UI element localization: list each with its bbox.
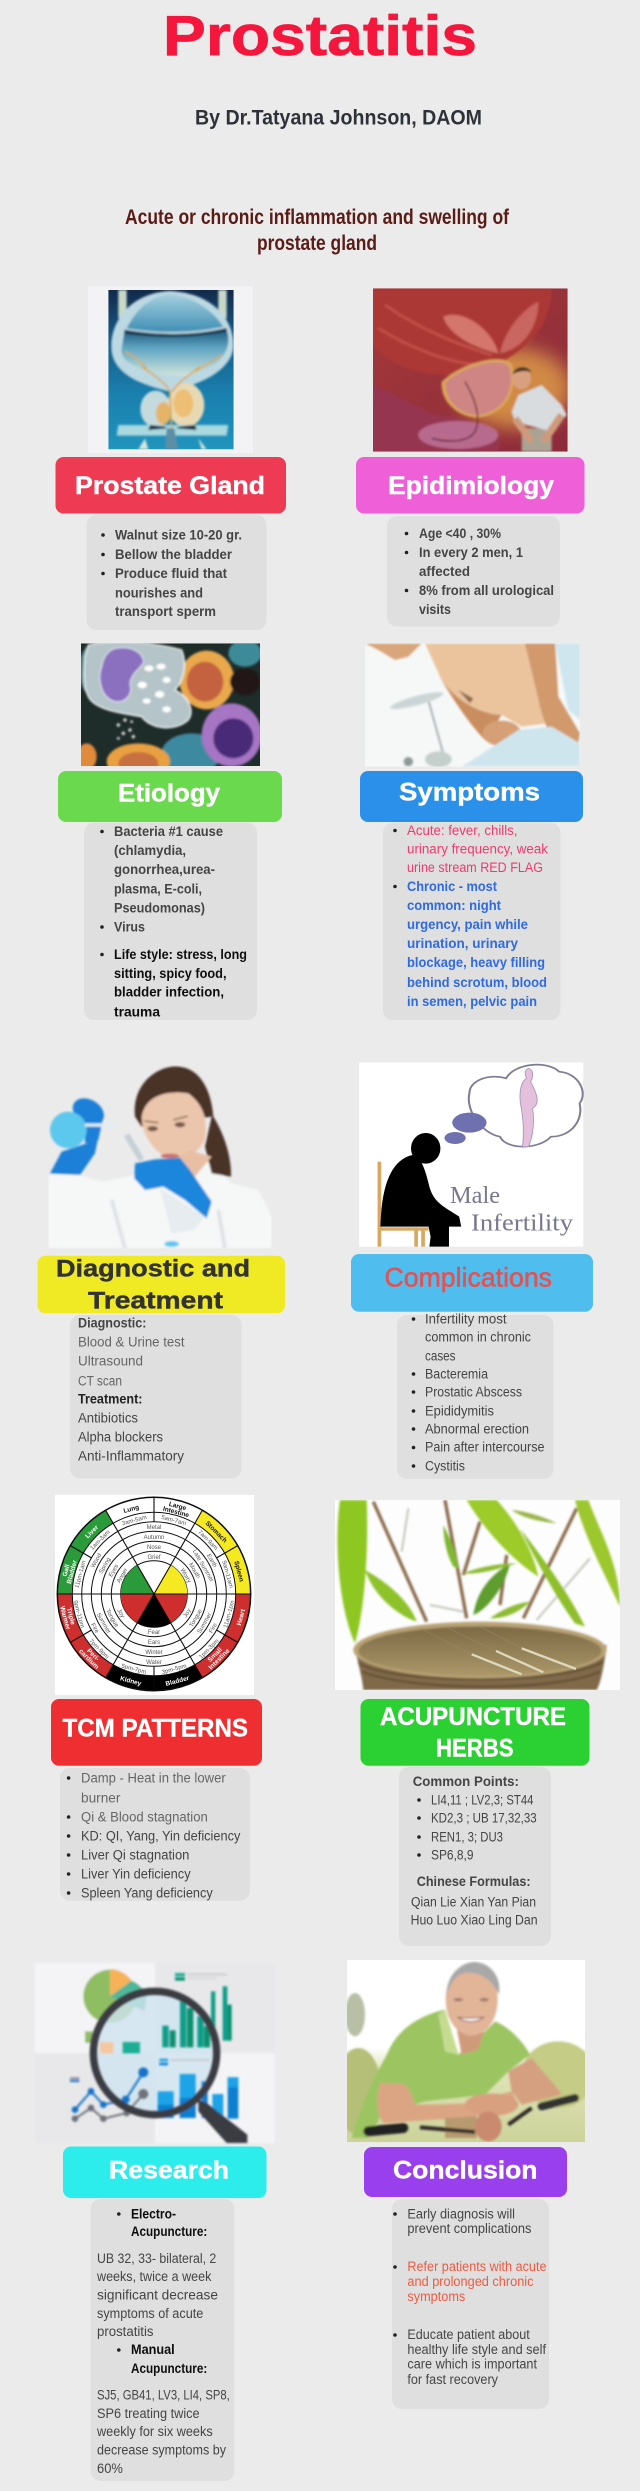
text box: epidemiology facts: Age <40 , 30% xyxy=(419,526,501,541)
text box: acute and chronic symptoms: blockage, heavy filling xyxy=(407,955,545,970)
text box: complications list xyxy=(397,1311,554,1479)
text box: etiology causes: Bacteria #1 cause xyxy=(114,824,223,839)
image: magnifying glass over charts xyxy=(35,1963,275,2143)
label: Etiology: Etiology xyxy=(118,780,220,808)
definition: prostate gland xyxy=(257,232,377,255)
text box: epidemiology facts: affected xyxy=(419,564,470,579)
text box: diagnostic and treatment list: Blood & Urine test xyxy=(78,1334,185,1349)
image: TCM organ clock wheel: Eyes xyxy=(108,1564,120,1578)
text box: conclusion points: prevent complications xyxy=(407,2221,532,2236)
image: TCM organ clock wheel: Lung xyxy=(123,1504,140,1515)
text box: TCM pattern list: Qi & Blood stagnation xyxy=(81,1809,208,1824)
text box: prostate gland facts: Walnut size 10-20 gr. xyxy=(115,528,242,543)
text box: acute and chronic symptoms: urgency, pain while xyxy=(407,917,528,932)
text box: research findings: decrease symptoms by xyxy=(97,2442,226,2458)
panel: conclusion xyxy=(335,1960,595,2409)
text box: acute and chronic symptoms: Acute: fever, chills, xyxy=(407,823,518,838)
image: TCM organ clock wheel: Kidney xyxy=(119,1675,142,1688)
text box: common points and formulas: Common Points: xyxy=(413,1774,519,1789)
text box: diagnostic and treatment list: Anti-Inflammatory xyxy=(78,1448,184,1463)
label: Research: Research xyxy=(109,2157,229,2185)
text box: diagnostic and treatment list: CT scan xyxy=(78,1373,122,1388)
image: TCM organ clock wheel: 9pm-11pm xyxy=(72,1600,85,1629)
text box: etiology causes: sitting, spicy food, xyxy=(114,966,226,981)
text box: complications list: Infertility most xyxy=(425,1311,507,1326)
panel: diagnostic and treatment xyxy=(38,1067,285,1478)
image: TCM organ clock wheel: 1pm-3pm xyxy=(198,1638,221,1661)
text box: conclusion points xyxy=(392,2199,549,2409)
image: TCM organ clock wheel: Liver xyxy=(84,1524,100,1540)
text box: TCM pattern list: KD: QI, Yang, Yin deficiency xyxy=(81,1828,241,1843)
image: TCM organ clock wheel: Bladder xyxy=(165,1675,190,1688)
image: TCM organ clock wheel: Stomach xyxy=(204,1520,228,1544)
text box: acute and chronic symptoms: in semen, pelvic pain xyxy=(407,994,537,1009)
image: TCM organ clock wheel: Mouth xyxy=(187,1562,201,1580)
image: TCM organ clock wheel: 5am-7am xyxy=(161,1515,187,1527)
text box: conclusion points: Educate patient about xyxy=(407,2327,530,2342)
text box: TCM pattern list: Liver Yin deficiency xyxy=(81,1866,191,1881)
text box: research findings: Acupuncture: xyxy=(131,2361,207,2376)
image: TCM organ clock wheel: Anger xyxy=(116,1568,129,1584)
image: TCM organ clock wheel: 11am-1pm xyxy=(223,1600,236,1629)
text box: research findings: significant decrease xyxy=(97,2287,218,2302)
text box: complications list: Abnormal erection xyxy=(425,1421,529,1436)
image: TCM organ clock wheel: Bladder xyxy=(66,1559,79,1585)
definition xyxy=(125,206,510,255)
text box: diagnostic and treatment list: Antibiotics xyxy=(78,1410,138,1425)
label: Diagnostic and Treatment xyxy=(38,1256,285,1315)
text box: research findings: SJ5, GB41, LV3, LI4, SP8, xyxy=(97,2387,230,2402)
label: ACUPUNCTURE HERBS: HERBS xyxy=(436,1735,514,1763)
text box: complications list: Bacteremia xyxy=(425,1366,488,1381)
text box: research findings: symptoms of acute xyxy=(97,2306,203,2321)
image: TCM organ clock wheel: 3pm-5pm xyxy=(161,1664,187,1676)
text box: prostate gland facts: Produce fluid that xyxy=(115,566,227,581)
label: Complications xyxy=(351,1254,593,1312)
image: man holding lower back xyxy=(365,643,580,767)
text box: common points and formulas: REN1, 3; DU3 xyxy=(431,1829,503,1844)
label: ACUPUNCTURE HERBS xyxy=(360,1699,590,1766)
image: TCM organ clock wheel: Joy xyxy=(183,1608,193,1619)
text box: epidemiology facts: 8% from all urological xyxy=(419,583,554,598)
panel: epidemiology xyxy=(356,288,584,626)
image: TCM organ clock wheel: Ears xyxy=(148,1640,160,1646)
label: TCM PATTERNS xyxy=(51,1699,262,1766)
label: Conclusion: Conclusion xyxy=(393,2157,538,2185)
label: Conclusion xyxy=(364,2147,567,2197)
text box: conclusion points: Early diagnosis will xyxy=(407,2206,515,2221)
text box: acute and chronic symptoms: urine stream RED FLAG xyxy=(407,860,543,875)
text box: acute and chronic symptoms: urination, urinary xyxy=(407,936,518,951)
text box: diagnostic and treatment list: Alpha blockers xyxy=(78,1429,163,1444)
text box: common points and formulas: Chinese Formulas: xyxy=(417,1874,531,1889)
image: TCM organ clock wheel: 7am-9am xyxy=(196,1530,218,1552)
label: Diagnostic and Treatment: Diagnostic and xyxy=(56,1256,250,1283)
label: ACUPUNCTURE HERBS: ACUPUNCTURE xyxy=(380,1703,566,1731)
image: TCM organ clock wheel: cardium xyxy=(77,1648,100,1671)
text box: conclusion points: symptoms xyxy=(407,2289,466,2304)
image: bladder and prostate illustration xyxy=(88,286,253,453)
text box: prostate gland facts xyxy=(86,515,266,630)
image: TCM organ clock wheel: Gall xyxy=(62,1564,72,1577)
panel: prostate gland xyxy=(56,286,286,630)
label: Symptoms xyxy=(360,771,583,822)
text box: prostate gland facts: nourishes and xyxy=(115,586,203,600)
image: TCM organ clock wheel: Fear xyxy=(148,1630,160,1636)
text box: complications list: Pain after intercourse xyxy=(425,1440,544,1455)
image: bamboo with acupuncture needles in bowl xyxy=(335,1500,620,1690)
text box: TCM pattern list: burner xyxy=(81,1790,121,1805)
text box: diagnostic and treatment list: Ultrasound xyxy=(78,1353,143,1368)
text box: research findings: Electro- xyxy=(131,2206,176,2221)
panel: symptoms xyxy=(360,643,583,1020)
text box: research findings: weekly for six weeks xyxy=(96,2424,213,2439)
text box: etiology causes: plasma, E-coli, xyxy=(114,881,202,896)
text box: conclusion points: healthy life style and self xyxy=(407,2342,546,2357)
text box: etiology causes: (chlamydia, xyxy=(114,843,186,858)
image: TCM organ clock wheel: Summer xyxy=(197,1612,213,1635)
text box: common points and formulas: KD2,3 ; UB 17,32,33 xyxy=(431,1810,537,1825)
text box: conclusion points: care which is important xyxy=(407,2357,537,2372)
label: Diagnostic and Treatment: Treatment xyxy=(88,1288,223,1315)
text box: etiology causes xyxy=(84,823,257,1020)
image: TCM organ clock wheel: Wood xyxy=(90,1553,103,1569)
label: Symptoms: Symptoms xyxy=(399,779,540,807)
image: TCM organ clock wheel: Nose xyxy=(147,1545,162,1551)
text box: prostate gland facts: transport sperm xyxy=(115,604,216,619)
text box: acute and chronic symptoms: common: night xyxy=(407,898,501,913)
image: TCM organ clock wheel: Large xyxy=(168,1501,187,1512)
text box: TCM pattern list: Damp - Heat in the lower xyxy=(81,1770,226,1785)
text box: acute and chronic symptoms xyxy=(383,823,560,1020)
text box: epidemiology facts: In every 2 men, 1 xyxy=(419,545,523,560)
image: TCM organ clock wheel: 9am-11am xyxy=(220,1560,233,1589)
label: Epidimiology xyxy=(356,457,584,514)
text box: research findings: UB 32, 33- bilateral, 2 xyxy=(97,2251,216,2266)
text box: TCM pattern list: Liver Qi stagnation xyxy=(81,1847,189,1862)
text box: etiology causes: Virus xyxy=(114,920,145,935)
text box: TCM pattern list xyxy=(60,1768,250,1901)
image: TCM organ clock wheel: Warmer xyxy=(58,1605,71,1631)
image: TCM organ clock wheel: Small xyxy=(207,1646,224,1664)
label: Etiology xyxy=(58,771,282,822)
text box: etiology causes: gonorrhea,urea- xyxy=(114,862,215,877)
image: TCM organ clock wheel: Metal xyxy=(147,1525,161,1531)
label: Prostate Gland: Prostate Gland xyxy=(75,472,265,500)
text box: diagnostic and treatment list xyxy=(70,1315,242,1478)
image: TCM organ clock wheel: 11pm-1am xyxy=(75,1560,88,1589)
text box: acute and chronic symptoms: urinary frequency, weak xyxy=(407,841,548,856)
label: TCM PATTERNS: TCM PATTERNS xyxy=(62,1715,248,1743)
text box: diagnostic and treatment list: Diagnostic: xyxy=(78,1315,146,1330)
text box: research findings: SP6 treating twice xyxy=(97,2406,200,2421)
label: Epidimiology: Epidimiology xyxy=(388,472,554,500)
image: TCM organ clock wheel xyxy=(55,1495,254,1695)
image: TCM organ clock wheel: 5pm-7pm xyxy=(121,1664,147,1676)
image: TCM organ clock wheel: Spleen xyxy=(232,1560,245,1583)
header xyxy=(125,4,510,255)
image: TCM organ clock wheel: Triple xyxy=(65,1607,76,1626)
text box: epidemiology facts xyxy=(387,516,560,626)
image: TCM organ clock wheel: 7pm-9pm xyxy=(87,1638,110,1661)
image: TCM organ clock wheel: Grief xyxy=(147,1555,161,1561)
text box: common points and formulas: Qian Lie Xian Yan Pian xyxy=(411,1895,536,1910)
image: TCM organ clock wheel: Earth xyxy=(205,1553,217,1569)
image: microscopic cells xyxy=(81,643,260,766)
label: Research xyxy=(63,2146,266,2198)
image: TCM organ clock wheel: 3am-5am xyxy=(121,1515,147,1527)
image: TCM organ clock wheel: Worry xyxy=(179,1568,192,1584)
text box: prostate gland facts: Bellow the bladder xyxy=(115,547,233,562)
image: male infertility illustration xyxy=(359,1062,583,1247)
text box: conclusion points: and prolonged chronic xyxy=(407,2274,534,2289)
image: TCM organ clock wheel: Late Summer xyxy=(191,1549,214,1583)
label: Prostate Gland xyxy=(56,457,286,514)
text box: common points and formulas: LI4,11 ; LV2,3; ST44 xyxy=(431,1792,534,1807)
text box: research findings: prostatitis xyxy=(97,2324,154,2339)
text box: complications list: Cystitis xyxy=(425,1458,465,1473)
text box: etiology causes: bladder infection, xyxy=(114,985,224,1000)
image: prostate anatomy with man xyxy=(373,288,572,452)
text box: TCM pattern list: Spleen Yang deficiency xyxy=(81,1885,213,1900)
text box: epidemiology facts: visits xyxy=(419,602,451,617)
image: TCM organ clock wheel: Winter xyxy=(145,1650,163,1656)
text box: complications list: Epididymitis xyxy=(425,1403,494,1418)
image: TCM organ clock wheel: Spring xyxy=(99,1557,112,1575)
text box: complications list: cases xyxy=(425,1348,456,1363)
text box: common points and formulas xyxy=(399,1767,551,1946)
panel: research xyxy=(35,1963,275,2481)
image: TCM organ clock wheel: Autumn xyxy=(144,1535,164,1541)
text box: etiology causes: trauma xyxy=(114,1005,161,1020)
text box: common points and formulas: Huo Luo Xiao Ling Dan xyxy=(411,1913,538,1928)
text box: research findings: weeks, twice a week xyxy=(96,2269,212,2284)
image: TCM organ clock wheel: Water xyxy=(146,1660,162,1666)
image: TCM organ clock wheel: Fire xyxy=(89,1623,100,1635)
text box: acute and chronic symptoms: behind scrotum, blood xyxy=(407,975,547,990)
image: TCM organ clock wheel: Intestine xyxy=(207,1647,232,1671)
panel: TCM patterns xyxy=(51,1495,262,1901)
title: Prostatitis xyxy=(163,4,477,68)
panel: etiology xyxy=(58,640,282,1020)
definition: Acute or chronic inflammation and swelling of xyxy=(125,206,510,229)
text box: complications list: common in chronic xyxy=(425,1330,531,1345)
text box: etiology causes: Life style: stress, long xyxy=(114,947,247,962)
image: TCM organ clock wheel: Heart xyxy=(236,1608,247,1626)
image: TCM organ clock wheel: Tongue xyxy=(189,1608,204,1629)
image caption text: Infertility xyxy=(471,1211,573,1237)
panel: acupuncture and herbs xyxy=(335,1500,620,1946)
text box: diagnostic and treatment list: Treatment: xyxy=(78,1391,142,1406)
image: TCM organ clock wheel: Intestine xyxy=(162,1506,190,1519)
byline: By Dr.Tatyana Johnson, DAOM xyxy=(195,106,482,130)
image: smiling man on bicycle xyxy=(335,1960,595,2142)
text box: etiology causes: Pseudomonas) xyxy=(114,901,205,916)
image: TCM organ clock wheel: Tongue xyxy=(104,1608,119,1629)
image: TCM organ clock wheel: Summer xyxy=(95,1612,111,1635)
image caption text: Male xyxy=(450,1183,500,1209)
text box: common points and formulas: SP6,8,9 xyxy=(431,1847,474,1862)
text box: research findings: Acupuncture: xyxy=(131,2224,207,2239)
text box: conclusion points: Refer patients with acute xyxy=(407,2259,546,2274)
panel: complications xyxy=(351,1062,593,1479)
text box: research findings: Manual xyxy=(131,2342,175,2357)
label: Complications: Complications xyxy=(384,1263,552,1293)
text box: research findings: 60% xyxy=(97,2461,123,2476)
image: TCM organ clock wheel: Peri- xyxy=(85,1648,100,1663)
image: TCM organ clock wheel: 1am-3am xyxy=(90,1530,112,1552)
image: scientist with blue gloves and flask xyxy=(48,1067,272,1248)
text box: research findings xyxy=(91,2199,234,2481)
image caption text xyxy=(450,1183,573,1237)
image: TCM organ clock wheel: Joy xyxy=(115,1608,125,1619)
text box: conclusion points: for fast recovery xyxy=(407,2372,498,2387)
text box: complications list: Prostatic Abscess xyxy=(425,1384,522,1399)
text box: acute and chronic symptoms: Chronic - most xyxy=(407,879,497,894)
image: TCM organ clock wheel: Fire xyxy=(209,1622,219,1634)
